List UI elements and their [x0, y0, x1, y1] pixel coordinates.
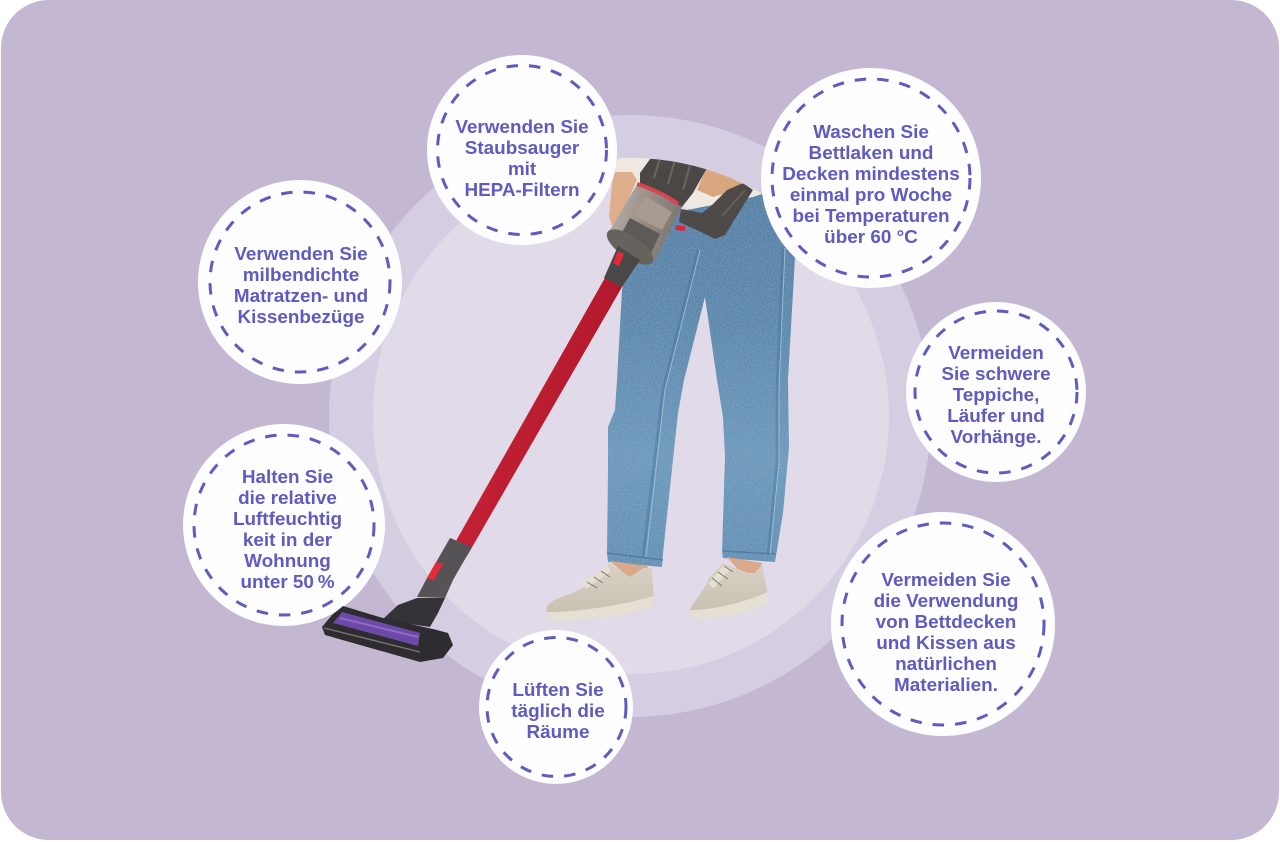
brush body [322, 606, 453, 662]
left sneaker [547, 563, 654, 622]
tip bubble: natural bedding [831, 512, 1055, 736]
tip bubble: mite-proof covers [198, 180, 402, 384]
tip bubble: HEPA vacuum [427, 55, 617, 245]
lower connector [417, 538, 472, 598]
tip bubble: natural bedding: und Kissen aus [876, 633, 1016, 654]
ankles [610, 557, 762, 577]
tip bubble: natural bedding: Materialien. [894, 675, 998, 696]
canister, motor and handle [606, 158, 753, 265]
lower red button [427, 562, 443, 580]
tip bubble: avoid carpets: Sie schwere [941, 364, 1051, 385]
tip bubble: HEPA vacuum: mit [508, 159, 537, 180]
jeans [607, 193, 795, 567]
tip bubble: avoid carpets: Vorhänge. [951, 427, 1041, 448]
tip bubble: humidity: unter 50 % [240, 572, 335, 593]
tip bubble: mite-proof covers: milbendichte [243, 265, 359, 286]
tip bubble: humidity: Wohnung [244, 551, 331, 572]
photo: vacuum floor head [322, 538, 472, 662]
tip bubble: humidity [183, 424, 385, 626]
tip bubble: avoid carpets: Teppiche, [953, 385, 1039, 406]
tip bubble: natural bedding: natürlichen [895, 654, 997, 675]
tip bubble: wash bedding: Decken mindestens [782, 164, 960, 185]
photo: person legs with jeans and sneakers [547, 150, 795, 622]
tip bubble: natural bedding: die Verwendung [874, 591, 1018, 612]
tip bubble: ventilate: Lüften Sie [512, 680, 604, 701]
red tube [452, 276, 622, 556]
tip bubble: avoid carpets: Vermeiden [948, 343, 1044, 364]
tip bubble: natural bedding: von Bettdecken [876, 612, 1016, 633]
tip bubble: wash bedding [761, 68, 981, 288]
tip bubble: wash bedding: Waschen Sie [813, 122, 929, 143]
brush light edge [324, 628, 420, 652]
tip bubble: HEPA vacuum: Staubsauger [465, 138, 580, 159]
tip bubble: wash bedding: über 60 °C [824, 227, 918, 248]
tip bubble: HEPA vacuum: HEPA-Filtern [464, 180, 580, 201]
upper red button [613, 251, 624, 266]
tip bubble: wash bedding: bei Temperaturen [792, 206, 950, 227]
inner backdrop circle [373, 158, 889, 674]
sweater and hands [609, 158, 762, 226]
tip bubble: mite-proof covers: Kissenbezüge [237, 307, 365, 328]
tip bubble: HEPA vacuum: Verwenden Sie [455, 117, 589, 138]
tip bubble: avoid carpets: Läufer und [947, 406, 1045, 427]
tip bubble: wash bedding: Bettlaken und [809, 143, 933, 164]
right sneaker [690, 563, 768, 620]
tip bubble: humidity: keit in der [243, 530, 333, 551]
outer backdrop circle [329, 115, 931, 717]
tip bubble: mite-proof covers: Verwenden Sie [234, 244, 368, 265]
tip bubble: natural bedding: Vermeiden Sie [881, 570, 1011, 591]
tip bubble: wash bedding: einmal pro Woche [790, 185, 952, 206]
upper connector [604, 246, 640, 287]
neck joint [382, 598, 445, 627]
tip bubble: humidity: Luftfeuchtig [233, 509, 342, 530]
tip bubble: ventilate: täglich die [511, 701, 605, 722]
tip bubble: mite-proof covers: Matratzen- und [234, 286, 368, 307]
tip bubble: humidity: Halten Sie [242, 467, 333, 488]
tip bubble: avoid carpets [906, 302, 1086, 482]
photo: vacuum cleaner upper body and tube [452, 155, 753, 556]
purple roller [333, 612, 420, 646]
tip bubble: humidity: die relative [238, 488, 337, 509]
tip bubble: ventilate: Räume [526, 722, 590, 743]
tip bubble: ventilate [479, 630, 633, 784]
jeans seams [643, 250, 698, 557]
